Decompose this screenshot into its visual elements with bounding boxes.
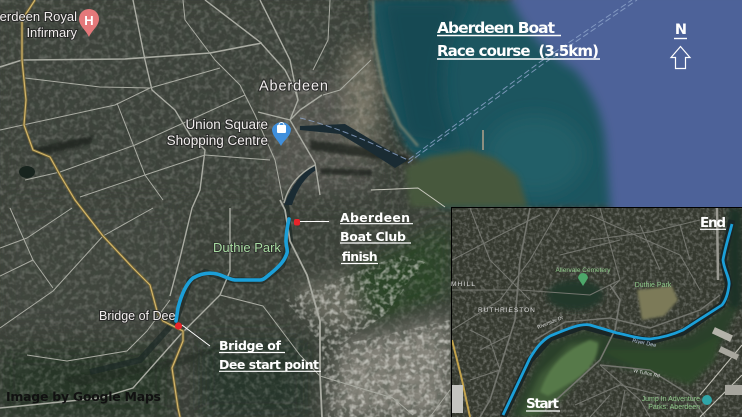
inset: green corridor along river (510, 208, 742, 417)
harbour water (284, 124, 408, 205)
callout: Aberdeen Boat Club finish: Boat Club (340, 229, 406, 244)
sandy shoreline (373, 0, 418, 146)
icon: north arrow (671, 46, 690, 68)
inset: river water (503, 220, 732, 417)
icon: hospital marker (79, 9, 99, 37)
start point marker (175, 322, 182, 330)
dark tree bands (32, 135, 408, 386)
race route on main map (176, 219, 289, 321)
callout: Bridge of Dee start point: Dee start point (219, 357, 319, 372)
inset: River Dee label: River Dee (632, 338, 657, 349)
icon: hospital marker: H (84, 13, 94, 28)
inset label: End: End (700, 215, 726, 231)
inset: Jump In Adventure Parks label: Parks: Aberdeen (648, 404, 700, 411)
panel: inset map (451, 207, 742, 417)
inset: Ruthrieston label: RUTHRIESTON (478, 307, 536, 314)
callout: Aberdeen Boat Club finish (340, 210, 413, 264)
inset: Duthie Park lawn (637, 286, 678, 320)
inset: Duthie Park label: Duthie Park (635, 282, 672, 289)
road network (0, 0, 450, 417)
inset: Allervale Cemetery label: Allervale Cemetery (556, 267, 611, 274)
headland (405, 150, 528, 207)
dashed ferry route (300, 0, 637, 163)
reservoir (19, 166, 35, 178)
river dee channel (90, 205, 290, 372)
inset label: Start: Start (526, 396, 560, 412)
image credit: Image by Google Maps (6, 389, 161, 404)
finish leader line (300, 220, 329, 222)
title: Aberdeen Boat (437, 19, 556, 37)
callout: Aberdeen Boat Club finish: Aberdeen (340, 210, 410, 225)
start leader line (182, 325, 210, 346)
north label: N (675, 22, 687, 38)
callout: Aberdeen Boat Club finish: finish (342, 249, 378, 264)
inset: playing field (540, 340, 598, 396)
title: Race course (3.5km) (437, 42, 599, 60)
inset: Jump In Adventure Parks label (642, 396, 700, 411)
map label: Union Square Shopping Centre (167, 117, 268, 148)
inset: Jump In Adventure Parks label: Jump In Adventure (642, 396, 700, 403)
urban speckle (286, 255, 450, 417)
inset: cemetery marker (578, 273, 588, 286)
breakwater (482, 130, 484, 150)
icon: shopping marker (272, 122, 291, 146)
inset: Riverside Dr label: Riverside Dr (537, 315, 565, 331)
inset: Mannofield label: MHILL (451, 281, 476, 288)
map label: Bridge of Dee: Bridge of Dee (99, 309, 175, 323)
map label: Aberdeen: Aberdeen (259, 78, 328, 94)
map label: Aberdeen Royal Infirmary: Infirmary (26, 25, 77, 40)
callout: Bridge of Dee start point (219, 338, 321, 372)
finish point marker (294, 219, 300, 226)
inset race route (503, 224, 732, 415)
sea (300, 0, 742, 230)
title (437, 19, 600, 60)
map label: Duthie Park: Duthie Park (213, 240, 281, 255)
map label: Aberdeen Royal Infirmary (0, 9, 77, 40)
inset: attraction marker (702, 395, 712, 405)
callout: Bridge of Dee start point: Bridge of (219, 338, 282, 353)
inset: streets (452, 208, 742, 417)
inset: W Tullos Rd label: W Tullos Rd (633, 368, 660, 380)
map label: Union Square Shopping Centre: Union Square (185, 117, 268, 132)
map label: Union Square Shopping Centre: Shopping Centre (167, 133, 268, 148)
